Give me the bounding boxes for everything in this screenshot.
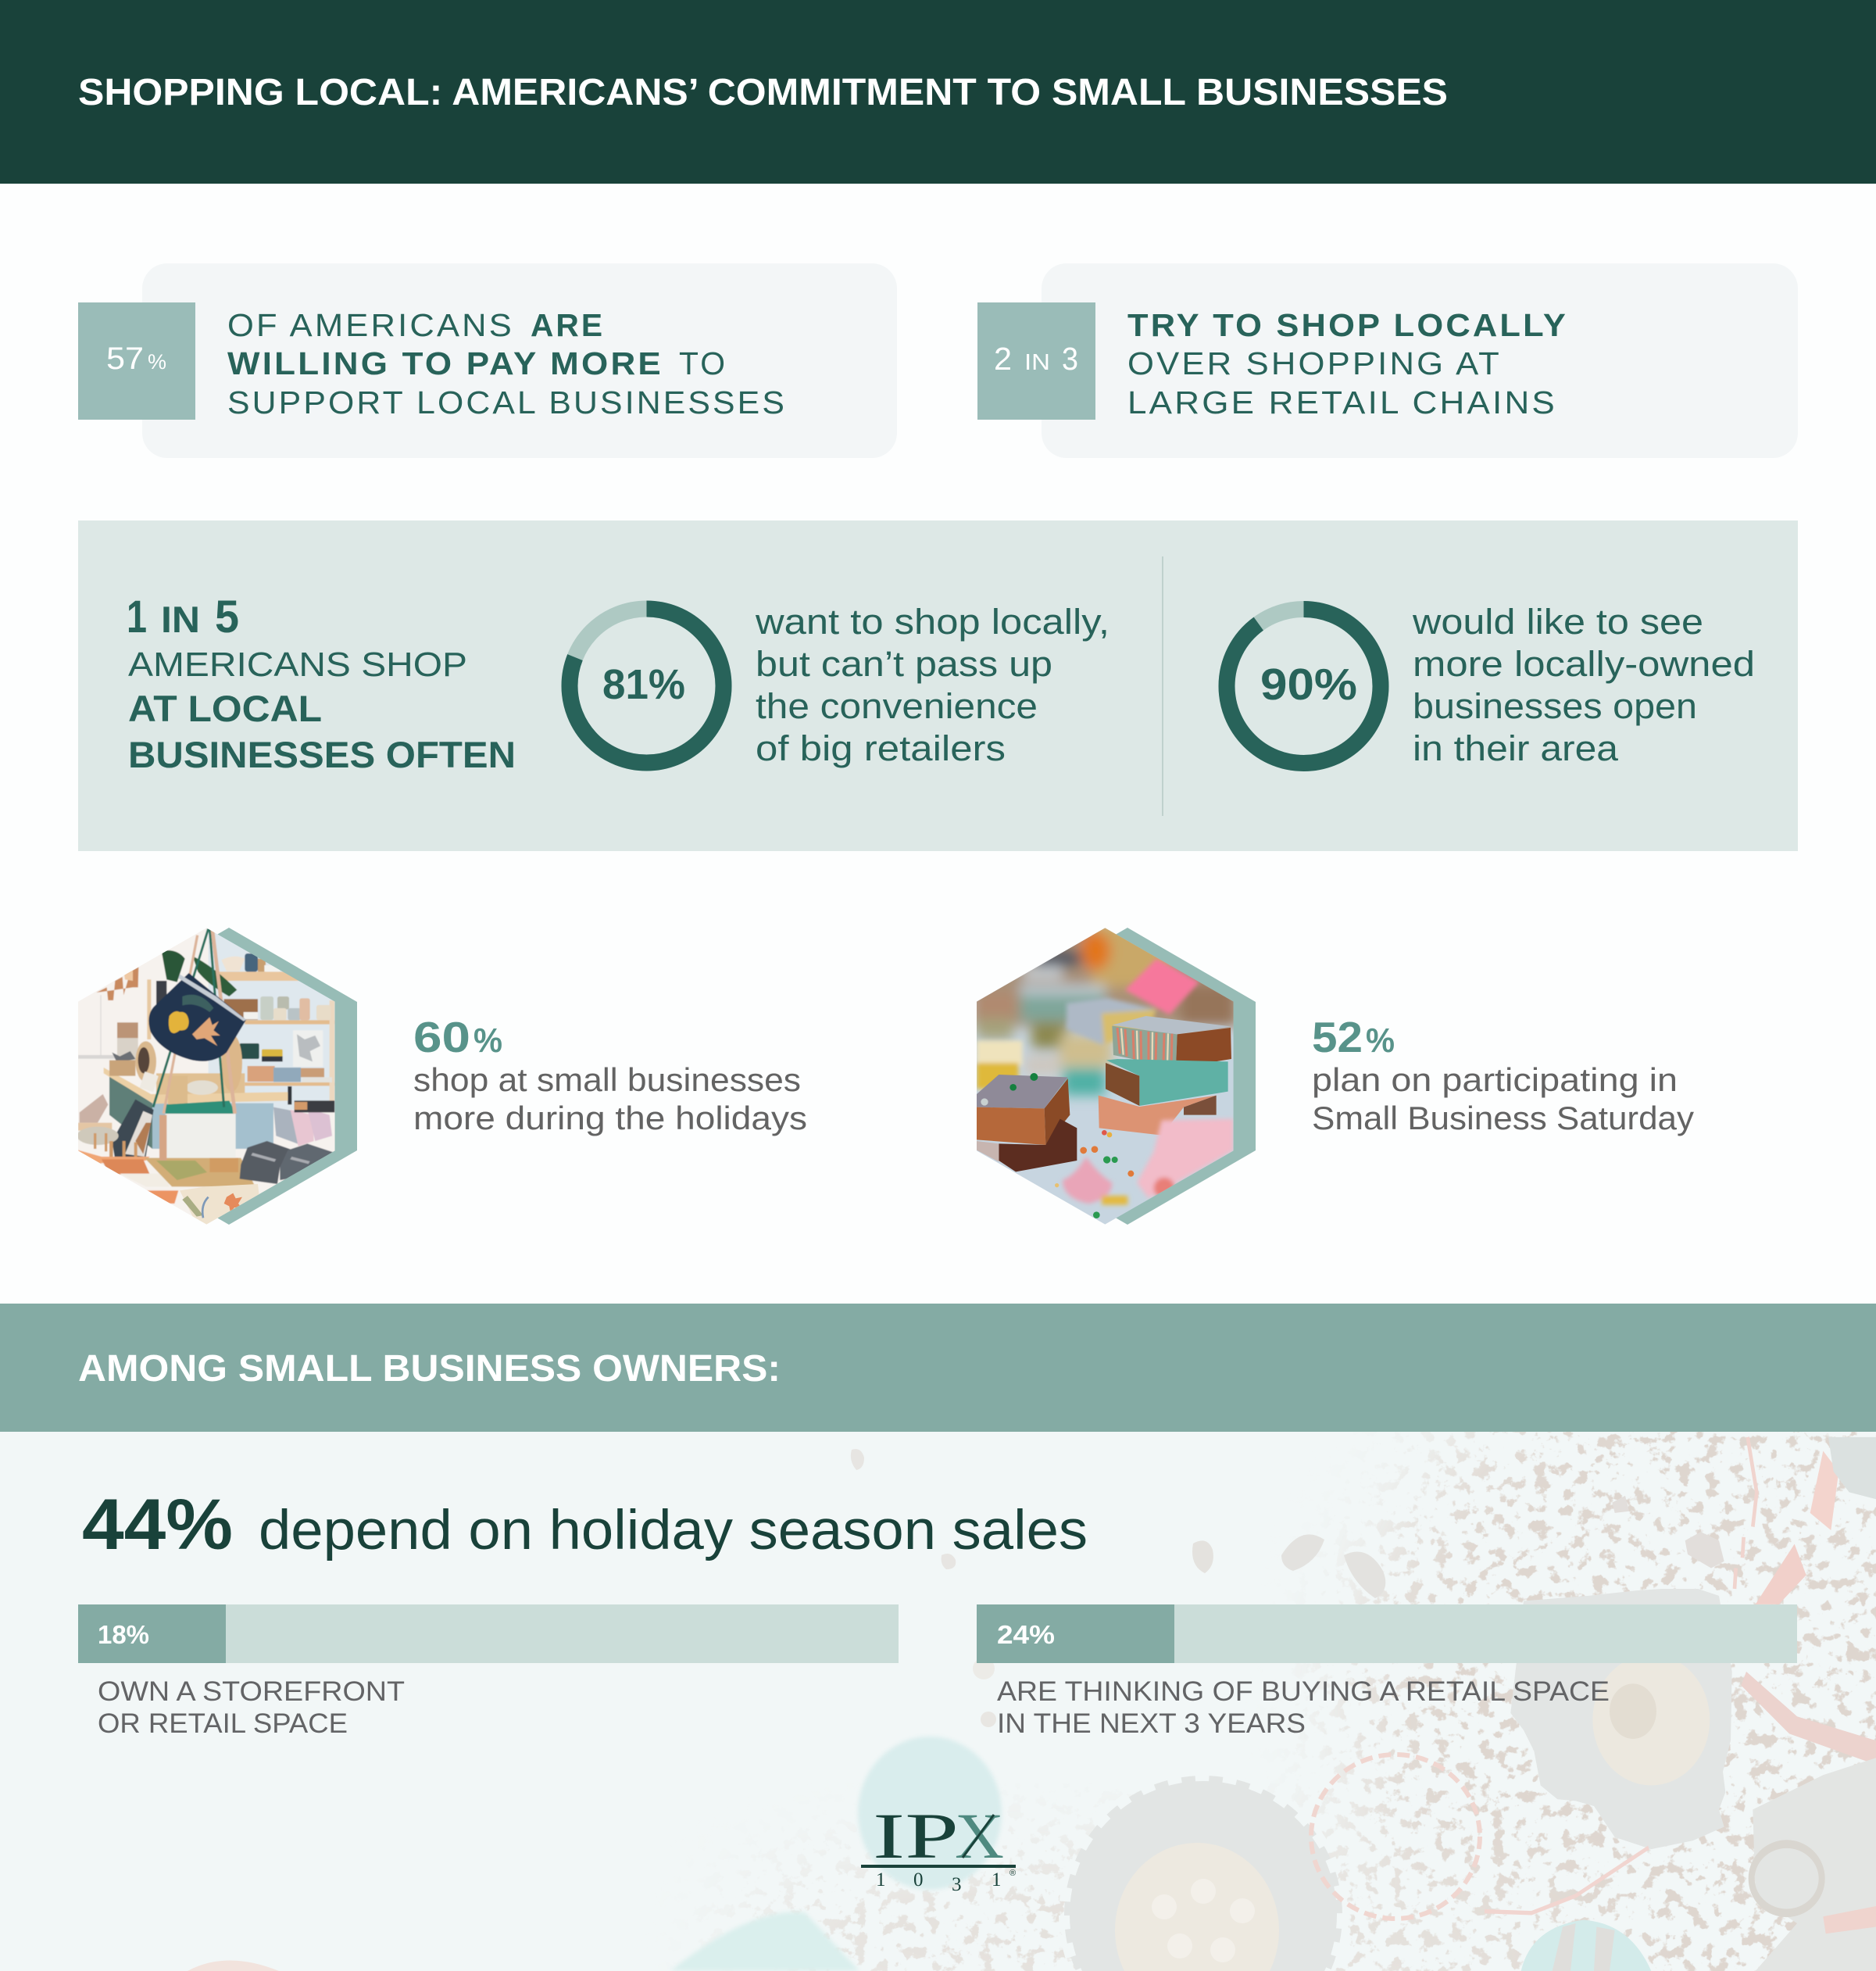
text: 1 in 5: AMERICANS SHOP (128, 646, 467, 684)
cards and books (80, 1094, 108, 1123)
text: willing to pay more (227, 307, 787, 420)
logo: IPX 1031: 1 (992, 1869, 1002, 1891)
text: 60% holidays: % (473, 1021, 502, 1060)
text: would like to see (1412, 602, 1755, 768)
badge: 57%: % (148, 350, 166, 374)
bar label: own a storefront (98, 1676, 405, 1739)
text: want to shop locally: of big retailers (756, 728, 1006, 768)
text: 60% holidays: shop at small businesses (413, 1061, 801, 1098)
logo: IPX 1031: 0 (913, 1869, 924, 1891)
bar chart: own a storefront 18%: 18% (98, 1620, 149, 1649)
donut chart: 81%: 81% (602, 661, 685, 708)
text: would like to see: would like to see (1412, 602, 1703, 642)
text: want to shop locally: but can’t pass up (756, 644, 1052, 684)
crumbs (1685, 1532, 1724, 1569)
text: would like to see: businesses open (1413, 686, 1697, 726)
dark cupcake bottom right (1753, 1758, 1876, 1971)
text: 52% Small Business Saturday: 52 (1312, 1013, 1363, 1061)
twine ring (1311, 1755, 1480, 1919)
stat card: 2 in 3 (977, 263, 1798, 458)
title: SHOPPING LOCAL: AMERICANS’ COMMITMENT TO SMALL BUSINESSES (78, 72, 1448, 113)
text: willing to pay more: WILLING TO PAY MORE (227, 345, 663, 381)
dark corner cupcake top right (1828, 1437, 1876, 1499)
text: 1 in 5 (127, 592, 516, 775)
headline: 44% holiday sales (82, 1485, 1088, 1565)
text: 1 in 5: 1 (127, 592, 147, 642)
text: want to shop locally: want to shop locally, (755, 602, 1110, 642)
bar chart: own a storefront 18% (78, 1604, 899, 1663)
badge: 2 in 3: 3 (1062, 341, 1078, 377)
text: 60% holidays (413, 1013, 807, 1136)
text: try to shop locally: OVER SHOPPING AT (1127, 345, 1502, 381)
text: willing to pay more: ARE (531, 307, 605, 343)
section band: small business owners (0, 1304, 1876, 1432)
section band: small business owners: AMONG SMALL BUSINESS OWNERS: (78, 1348, 781, 1390)
faded background photo: cupcakes and crumbs (0, 1432, 1876, 1971)
divider (1162, 556, 1163, 816)
text: would like to see: in their area (1413, 728, 1619, 768)
badge: 2 in 3: 2 (994, 341, 1012, 377)
splatter texture (749, 1432, 1876, 1971)
text: try to shop locally: TRY TO SHOP LOCALLY (1127, 307, 1568, 343)
text: willing to pay more: SUPPORT LOCAL BUSINESSES (227, 385, 787, 420)
badge: 57% (78, 302, 195, 420)
bar chart: buying retail space 24%: 24% (997, 1620, 1055, 1649)
card stack and boxes (273, 1107, 301, 1145)
teal cake (858, 1737, 1002, 1890)
text: willing to pay more: OF AMERICANS (227, 307, 514, 343)
text: 1 in 5: 5 (215, 592, 239, 642)
text: 60% holidays: 60 (413, 1013, 470, 1061)
hexagon photo: handmade sweets (971, 922, 1256, 1229)
logo: IPX 1031: IP (873, 1800, 959, 1872)
cupcake bottom centre (1064, 1776, 1342, 1971)
bar chart: buying retail space 24% (977, 1604, 1797, 1663)
teal cupcake bottom (1521, 1920, 1651, 1971)
donut chart: 90% (1227, 610, 1381, 763)
teal wrapper bottom left (670, 1912, 859, 1971)
text: 52% Small Business Saturday: plan on participating in (1312, 1061, 1678, 1098)
text: try to shop locally: LARGE RETAIL CHAINS (1127, 385, 1557, 420)
logo: IPX 1031: ® (1009, 1869, 1016, 1878)
hexagon photo: local shop interior (73, 922, 357, 1229)
text: willing to pay more: TO (679, 345, 727, 381)
logo: IPX 1031: 1 (876, 1869, 886, 1891)
text: 52% Small Business Saturday: % (1366, 1021, 1395, 1060)
text: 1 in 5: IN (161, 599, 200, 640)
text: would like to see: more locally-owned (1413, 644, 1755, 684)
bar label: own a storefront: OR RETAIL SPACE (98, 1708, 348, 1739)
badge: 2 in 3: IN (1024, 350, 1050, 375)
text: 1 in 5: AT LOCAL (128, 688, 322, 729)
text: want to shop locally (755, 602, 1110, 768)
bar label: buying retail space (997, 1676, 1610, 1739)
text: 52% Small Business Saturday (1312, 1013, 1694, 1136)
base platform (145, 1158, 255, 1186)
logo: IPX 1031: 3 (952, 1874, 961, 1895)
bar label: buying retail space: ARE THINKING OF BUYING A RETAIL SPACE (997, 1676, 1610, 1707)
stat card: 57% (78, 263, 897, 458)
bar label: own a storefront: OWN A STOREFRONT (98, 1676, 405, 1707)
badge: 2 in 3 (977, 302, 1095, 420)
donut chart: 90%: 90% (1260, 660, 1357, 710)
display table (109, 1076, 152, 1149)
bar label: buying retail space: IN THE NEXT 3 YEARS (997, 1708, 1306, 1739)
shelf items (219, 971, 299, 981)
header band (0, 0, 1876, 184)
detail in right-hand photo area (1485, 1437, 1876, 1971)
text: 1 in 5: BUSINESSES OFTEN (128, 734, 516, 775)
text: try to shop locally (1127, 307, 1568, 420)
hanging bags (165, 1113, 236, 1149)
headline: 44% holiday sales: 44% (82, 1485, 233, 1565)
cupcake wrapper right (1510, 1589, 1732, 1849)
badge: 57%: 57 (106, 342, 144, 376)
donut chart: 81% (570, 609, 724, 763)
panel: shopping habits (78, 520, 1798, 851)
logo: IPX 1031 (861, 1800, 1016, 1895)
logo: IPX 1031: X (955, 1800, 1004, 1872)
text: 60% holidays: more during the holidays (413, 1100, 807, 1136)
crumbs near heading (1192, 1540, 1213, 1573)
text: want to shop locally: the convenience (756, 686, 1038, 726)
headline: 44% holiday sales: depend on holiday season sales (259, 1500, 1088, 1561)
fabric (180, 1184, 259, 1225)
text: 52% Small Business Saturday: Small Business Saturday (1312, 1100, 1694, 1136)
ribbons (1756, 1544, 1806, 1604)
